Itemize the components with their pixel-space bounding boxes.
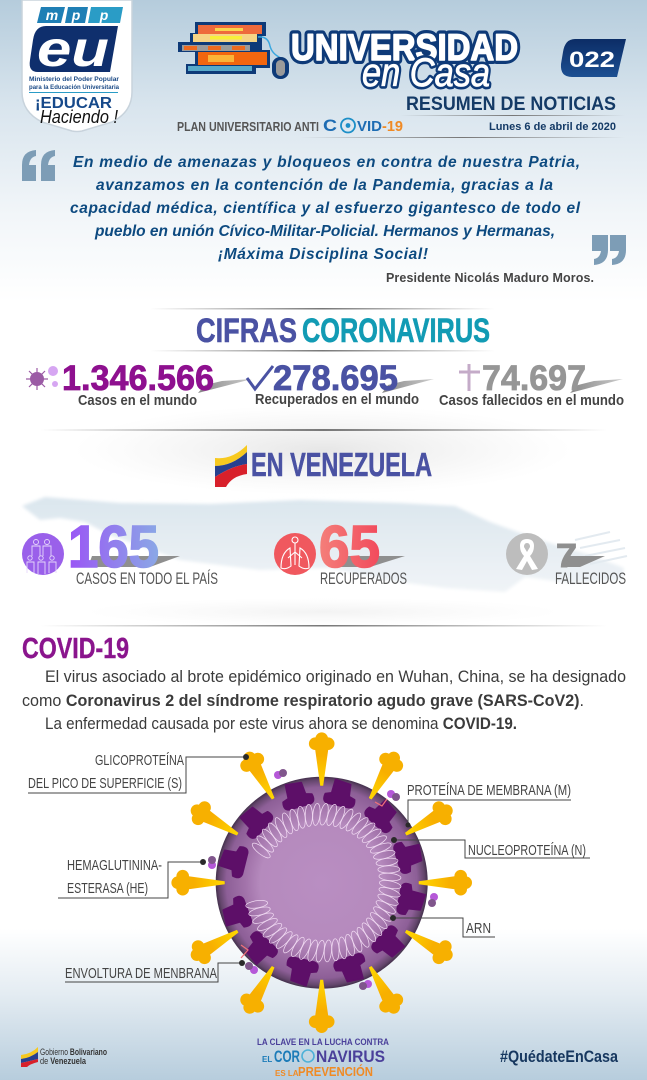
- stat: world cases: 1.346.566: [62, 359, 214, 398]
- footer: prevention slogan: COR: [274, 1047, 300, 1066]
- title: Universidad en Casa: en Casa: [362, 51, 490, 95]
- footer: prevention slogan: PREVENCIÓN: [298, 1064, 373, 1079]
- icon: closing quote: [592, 235, 626, 265]
- part labels: [28, 752, 586, 982]
- subtitle: Plan universitario: [177, 116, 403, 135]
- logo: ministry text: Ministerio del Poder Popular: [29, 76, 120, 83]
- badge: issue number: [561, 39, 626, 77]
- subtitle: Plan universitario: PLAN UNIVERSITARIO ANTI: [177, 120, 319, 134]
- title: Universidad en Casa: [291, 27, 518, 95]
- icon: lungs: [274, 533, 316, 575]
- subtitle: Plan universitario: VID: [357, 118, 382, 135]
- stat: Venezuela deaths: 7: [556, 537, 577, 574]
- stat: Venezuela cases: 165: [68, 514, 159, 580]
- date: Lunes 6 de abril de 2020: [489, 121, 616, 133]
- stat: Venezuela recovered: 65: [319, 514, 380, 580]
- stat: world cases: [26, 359, 252, 409]
- stat: world recovered: Recuperados en el mundo: [255, 391, 419, 408]
- stat: Venezuela recovered: [274, 514, 407, 588]
- icon: virus particles: [26, 366, 58, 390]
- part labels: PROTEÍNA DE MEMBRANA (M): [407, 782, 571, 799]
- HE protein blobs: [208, 769, 438, 990]
- stat: Venezuela cases: CASOS EN TODO EL PAÍS: [76, 569, 218, 588]
- body text: COVID-19 description: El virus asociado al brote epidémico originado en Wuhan, China, se ha designado: [45, 668, 626, 686]
- quote text: capacidad médica, científica y al esfuerzo gigantesco de todo el: [70, 200, 581, 217]
- footer: Gobierno Bolivariano logo: [21, 1047, 107, 1067]
- title: Universidad en Casa: UNIVERSIDAD: [291, 27, 518, 68]
- footer: prevention slogan: LA CLAVE EN LA LUCHA CONTRA: [257, 1037, 389, 1048]
- stat: world recovered: 278.695: [273, 359, 398, 398]
- logo: mpp bars: p: [99, 7, 109, 23]
- stat: world deaths: Casos fallecidos en el mundo: [439, 392, 624, 409]
- leader dots: [200, 754, 410, 966]
- logo: ministry text: para la Educación Universitaria: [29, 84, 120, 91]
- subtitle: Plan universitario: C: [323, 116, 337, 135]
- icon: check mark: [247, 366, 273, 389]
- logo: educar haciendo: ¡EDUCAR: [35, 95, 112, 112]
- title: Universidad en Casa: en Casa: [362, 51, 490, 95]
- icon: people: [22, 533, 64, 575]
- stat: world recovered: [247, 359, 434, 408]
- footer: prevention slogan: EL: [262, 1055, 272, 1064]
- body text: COVID-19 description: [22, 668, 626, 733]
- membrane proteins: [217, 778, 427, 988]
- footer: prevention slogan: [257, 1037, 389, 1079]
- heading: Resumen de noticias: RESUMEN DE NOTICIAS: [406, 94, 616, 115]
- virus spikes: [171, 732, 472, 1033]
- virus body: [216, 777, 428, 989]
- quote text: [70, 154, 581, 263]
- footer: hashtag: #QuédateEnCasa: [500, 1047, 618, 1066]
- part labels: ESTERASA (HE): [67, 881, 148, 897]
- quote text: avanzamos en la contención de la Pandemia, gracias a la: [96, 177, 553, 194]
- logo: mpp bars: p: [71, 7, 81, 23]
- part labels: GLICOPROTEÍNA: [95, 752, 184, 769]
- badge: issue number: 022: [569, 47, 615, 72]
- logo panel: MPPEU: [22, 0, 132, 132]
- heading: Cifras coronavirus: CIFRAS: [196, 312, 297, 350]
- footer: prevention slogan: NAVIRUS: [316, 1047, 385, 1066]
- logo: eu mark: eu: [37, 21, 109, 77]
- stat: Venezuela recovered: RECUPERADOS: [320, 570, 407, 588]
- heading: Cifras coronavirus: CORONAVIRUS: [302, 312, 490, 350]
- part labels: DEL PICO DE SUPERFICIE (S): [28, 776, 182, 792]
- part labels: ENVOLTURA DE MENBRANA: [65, 966, 217, 982]
- RNA coil: [244, 803, 402, 963]
- heading: COVID-19: COVID-19: [22, 633, 129, 665]
- footer: Gobierno Bolivariano logo: de Venezuela: [40, 1056, 87, 1067]
- subtitle: Plan universitario: -19: [382, 118, 403, 135]
- quote text: ¡Máxima Disciplina Social!: [218, 246, 428, 263]
- stat: world cases: Casos en el mundo: [78, 392, 197, 409]
- leader lines: [28, 757, 590, 982]
- quote attribution: Presidente Nicolás Maduro Moros.: [386, 271, 594, 285]
- map of Venezuela backdrop: [22, 497, 624, 592]
- stat: Venezuela deaths: [506, 532, 627, 588]
- quote text: pueblo en unión Cívico-Militar-Policial. Hermanos y Hermanas,: [94, 223, 555, 240]
- part labels: ARN: [466, 921, 491, 937]
- part labels: HEMAGLUTININA-: [67, 858, 162, 874]
- stat: world deaths: 74.697: [482, 359, 586, 398]
- footer: prevention slogan: ES LA: [275, 1069, 299, 1078]
- logo: mpp bars: [37, 7, 123, 23]
- footer: Gobierno Bolivariano logo: Gobierno Bolivariano: [40, 1047, 107, 1058]
- quote text: En medio de amenazas y bloqueos en contra de nuestra Patria,: [73, 154, 580, 171]
- body text: COVID-19 description: como Coronavirus 2 del síndrome respiratorio agudo grave (SARS-CoV2).: [22, 692, 584, 710]
- stat: world deaths: [439, 359, 624, 409]
- soft background halos: [73, 405, 573, 626]
- title: Universidad en Casa: UNIVERSIDAD: [291, 27, 518, 68]
- logo: educar haciendo: Haciendo !: [40, 107, 118, 127]
- heading: Cifras coronavirus: [196, 312, 490, 350]
- heading: En Venezuela: EN VENEZUELA: [251, 446, 432, 483]
- icon: cross: [459, 364, 480, 391]
- icon: ribbon: [506, 533, 548, 575]
- part labels: NUCLEOPROTEÍNA (N): [468, 842, 586, 859]
- logo: ministry text: [29, 76, 120, 91]
- diagram: coronavirus structure: [28, 732, 590, 1033]
- icon: books and mouse: [178, 22, 289, 79]
- icon: opening quote: [22, 150, 55, 181]
- logo: educar haciendo: [29, 92, 118, 127]
- stat: Venezuela cases: [22, 514, 218, 588]
- icon: Venezuelan flag: [215, 445, 247, 487]
- body text: COVID-19 description: La enfermedad causada por este virus ahora se denomina COVID-19.: [45, 715, 517, 733]
- logo: mpp bars: m: [46, 7, 58, 23]
